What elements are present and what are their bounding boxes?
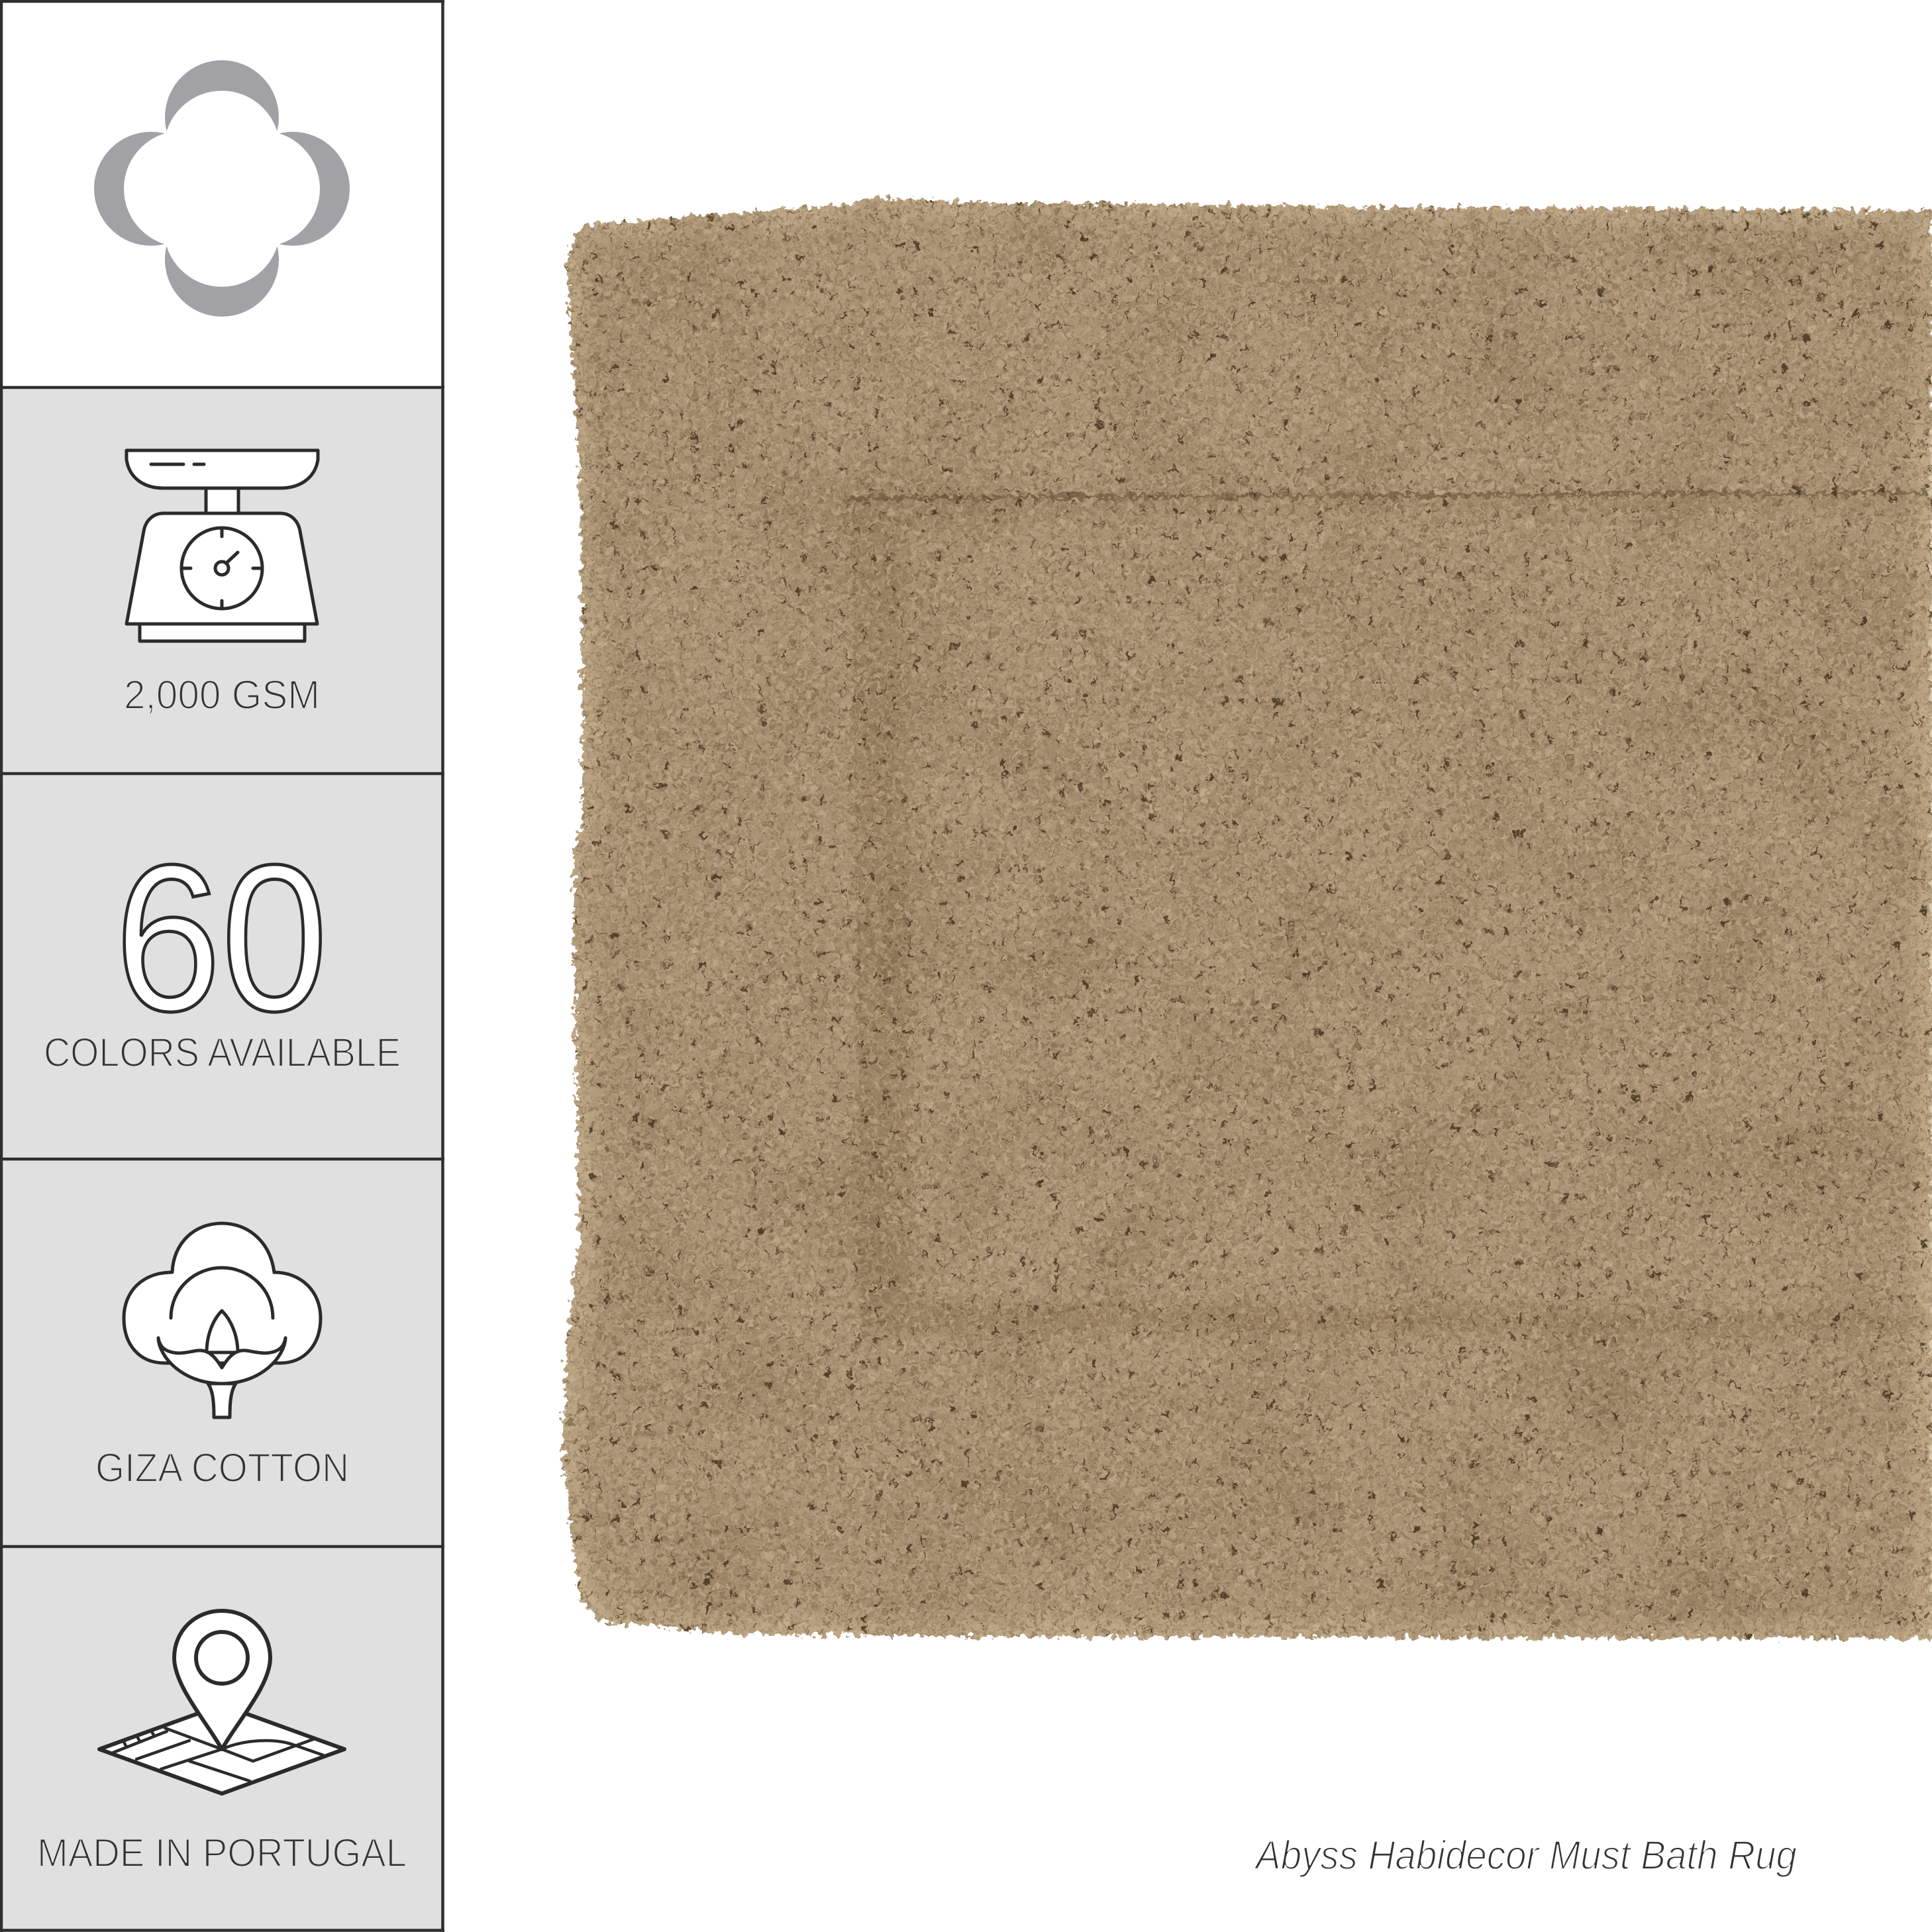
icon: map with location pin: [99, 1611, 344, 1794]
panel: made in Portugal: [1, 1547, 442, 1929]
label: 2,000 GSM: 2,000 GSM: [124, 672, 320, 717]
panel: 60 colors available: [1, 774, 442, 1159]
caption: Abyss Habidecor Must Bath Rug: [1253, 1833, 1797, 1878]
panel: brand logo: [1, 1, 442, 387]
icon: quatrefoil logo: [94, 60, 350, 317]
label: made in Portugal: MADE IN PORTUGAL: [37, 1831, 407, 1875]
panel grid lines: [0, 0, 444, 1932]
label: colors available: COLORS AVAILABLE: [44, 1030, 401, 1075]
number: 60: 60: [115, 821, 328, 1054]
icon: kitchen scale: [127, 450, 318, 641]
photo: beige bath rug: [556, 185, 1932, 1656]
label: Giza cotton: GIZA COTTON: [95, 1445, 349, 1490]
panel: weight 2,000 GSM: [1, 387, 442, 774]
icon: cotton boll: [124, 1223, 321, 1417]
panel: Giza cotton: [1, 1159, 442, 1547]
